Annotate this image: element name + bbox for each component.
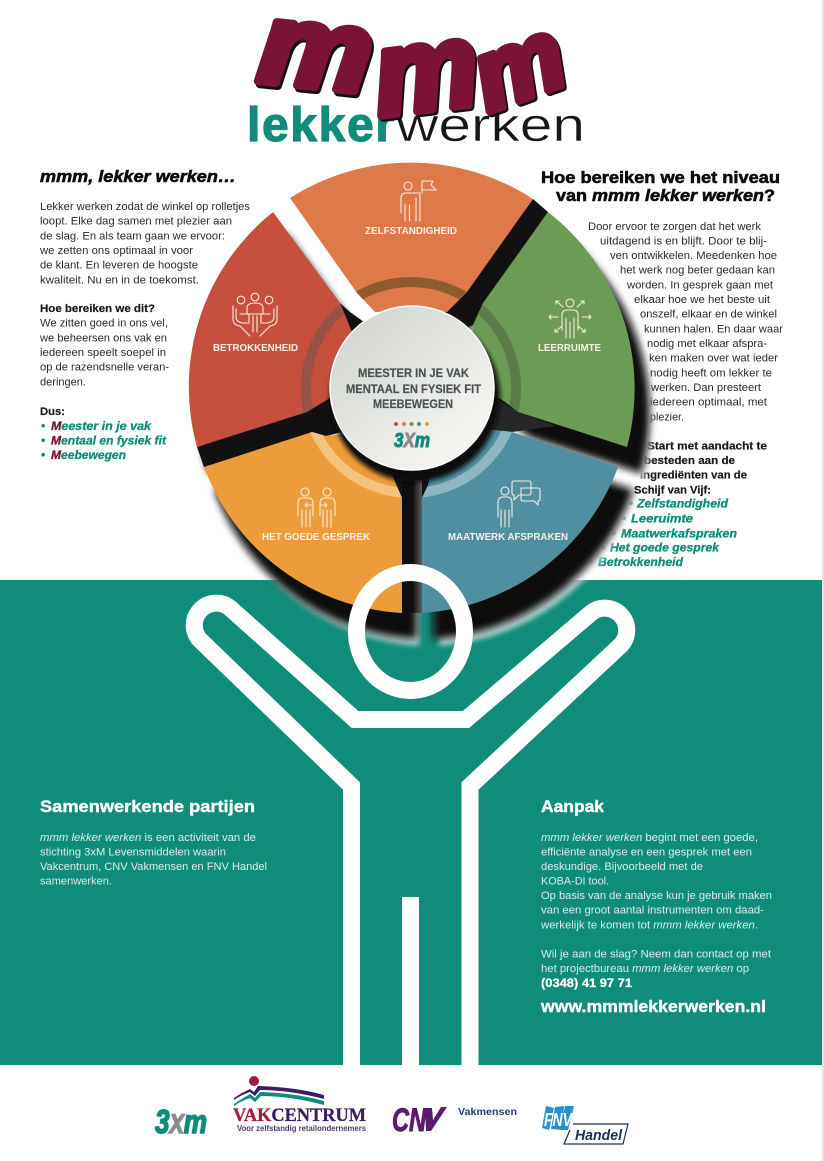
list: dus: •: [41, 421, 45, 433]
white gap between red and orange segments: [281, 190, 382, 328]
how we achieve this paragraph: iedereen speelt soepel in: [40, 347, 166, 359]
logo wordmark: mmm lekker werken: m: [459, 0, 581, 135]
logo: fnv handel: [542, 1106, 628, 1144]
body text: [540, 832, 772, 975]
body text: van een groot aantal instrumenten om daad-: [541, 905, 764, 917]
paragraph: start met aandacht: [634, 440, 767, 496]
list: schijf van vijf: Het goede gesprek: [610, 543, 720, 555]
phone number: (0348) 41 97 71: [541, 978, 633, 990]
heading: Samenwerkende partijen: [40, 797, 255, 816]
teal background panel: [0, 580, 822, 1065]
panel: samenwerkende partijen: [40, 797, 267, 888]
paragraph: door ervoor te zorgen: onszelf, elkaar en de winkel: [640, 309, 777, 321]
segment: leerruimte: [472, 212, 635, 447]
segment: maatwerk afspraken: MAATWERK AFSPRAKEN: [448, 531, 568, 543]
logo: cnv vakmensen: Vakmensen: [458, 1106, 517, 1118]
list: dus: Meebewegen: [51, 450, 126, 462]
heading: hoe bereiken we het niveau: [541, 168, 780, 205]
list: dus: [40, 406, 167, 462]
list: schijf van vijf: Leeruimte: [631, 513, 694, 525]
list: dus: Dus:: [40, 406, 65, 418]
paragraph: door ervoor te zorgen: [588, 221, 783, 423]
logo: vakcentrum: [233, 1076, 366, 1133]
paragraph: door ervoor te zorgen: uitdagend is en blijft. Door te blij-: [600, 235, 767, 247]
list: schijf van vijf: •: [589, 557, 593, 569]
logo wordmark: mmm lekker werken: m: [366, 0, 485, 142]
segment: zelfstandigheid: [290, 162, 533, 312]
paragraph: start met aandacht: ingrediënten van de: [640, 469, 747, 481]
intro paragraph: kwaliteit. Nu en in de toekomst.: [40, 274, 199, 286]
center disk shadow: [330, 312, 500, 482]
icon: person with speech bubbles: [498, 481, 540, 527]
intro paragraph: de slag. En als team gaan we ervoor:: [40, 230, 225, 242]
segment: betrokkenheid: BETROKKENHEID: [213, 342, 298, 354]
logo: 3xm small: 3Xm: [394, 430, 430, 452]
how we achieve this paragraph: we beheersen ons vak en: [39, 332, 167, 344]
intro paragraph: loopt. Elke dag samen met plezier aan: [40, 216, 232, 228]
segment: zelfstandigheid: ZELFSTANDIGHEID: [365, 225, 457, 237]
paragraph: door ervoor te zorgen: werken. Dan presteert: [650, 382, 761, 394]
how we achieve this paragraph: We zitten goed in ons vel,: [40, 318, 168, 330]
paragraph: start met aandacht: Start met aandacht te: [647, 440, 767, 452]
logo: cnv vakmensen: [392, 1102, 517, 1138]
list: schijf van vijf: Maatwerkafspraken: [621, 528, 737, 540]
intro paragraph: Lekker werken zodat de winkel op rolletjes: [40, 201, 250, 213]
logo: 3xm: 3Xm: [155, 1103, 207, 1140]
body text: [40, 832, 267, 888]
body text: KOBA-DI tool.: [541, 876, 609, 888]
panel: aanpak: [540, 797, 772, 1016]
list: schijf van vijf: •: [622, 513, 626, 525]
segment: het goede gesprek: HET GOEDE GESPREK: [262, 531, 370, 543]
logo: vakcentrum: Voor zelfstandig retailondernemers: [237, 1123, 366, 1133]
logo wordmark: mmm lekker werken: lekker: [247, 99, 394, 152]
paragraph: door ervoor te zorgen: Door ervoor te zorgen dat het werk: [588, 221, 761, 233]
body text: het projectbureau mmm lekker werken op: [541, 963, 749, 975]
wheel diagram: schijf van vijf: [189, 163, 652, 645]
right column text: [541, 168, 783, 569]
heading: hoe bereiken we het niveau: Hoe bereiken we het niveau: [541, 168, 780, 187]
center text: MEESTER IN JE VAK: [358, 366, 469, 380]
body text: stichting 3xM Levensmiddelen waarin: [40, 846, 226, 858]
how we achieve this paragraph: op de razendsnelle veran-: [40, 362, 169, 374]
segment: maatwerk afspraken: [422, 430, 618, 613]
list: schijf van vijf: •: [612, 528, 616, 540]
heading: Aanpak: [541, 797, 605, 816]
logo: fnv handel: FNV: [544, 1110, 574, 1130]
body text: samenwerken.: [40, 876, 112, 888]
list: schijf van vijf: •: [601, 543, 605, 555]
intro paragraph: [39, 201, 250, 286]
center disk: [330, 306, 494, 470]
how we achieve this paragraph: deringen.: [40, 376, 86, 388]
list: dus: Mentaal en fysiek fit: [51, 436, 167, 448]
body text: deskundige. Bijvoorbeeld met de: [541, 861, 703, 873]
logo: fnv handel: Handel: [575, 1128, 623, 1144]
segment: betrokkenheid: [188, 212, 352, 447]
heading: hoe bereiken we het niveau: van mmm lekker werken ?: [556, 186, 775, 205]
footer logos: [155, 1076, 628, 1144]
icon: two people talking: [298, 488, 335, 527]
center text: [346, 366, 482, 411]
paragraph: door ervoor te zorgen: elkaar hoe we het beste uit: [634, 294, 770, 306]
list: schijf van vijf: Betrokkenheid: [598, 557, 684, 569]
list: schijf van vijf: •: [629, 499, 633, 511]
paragraph: door ervoor te zorgen: ven ontwikkelen. Meedenken hoe: [610, 250, 777, 262]
paragraph: door ervoor te zorgen: iedereen optimaal, met: [650, 397, 767, 409]
paragraph: door ervoor te zorgen: plezier.: [650, 411, 684, 423]
website: www.mmmlekkerwerken.nl: [540, 997, 766, 1016]
paragraph: start met aandacht: besteden aan de: [644, 455, 735, 467]
figure: person with raised arms: [194, 572, 627, 1065]
body text: Vakcentrum, CNV Vakmensen en FNV Handel: [40, 861, 267, 873]
wheel drop shadow: [202, 187, 648, 637]
body text: Wil je aan de slag? Neem dan contact op met: [541, 948, 771, 960]
icon: three people at table: [233, 293, 277, 336]
center text: MENTAAL EN FYSIEK FIT: [346, 382, 482, 396]
icon: person with flag: [401, 181, 436, 221]
how we achieve this paragraph: Hoe bereiken we dit?: [40, 303, 155, 315]
paragraph: door ervoor te zorgen: worden. In gesprek gaan met: [626, 279, 773, 291]
body text: Op basis van de analyse kun je gebruik maken: [541, 890, 772, 902]
paragraph: door ervoor te zorgen: kunnen halen. En daar waar: [644, 323, 783, 335]
body text: mmm lekker werken begint met een goede,: [541, 832, 758, 844]
list: dus: •: [41, 450, 45, 462]
left intro column: [39, 167, 250, 462]
page edge: [822, 0, 824, 1161]
segment: leerruimte: LEERRUIMTE: [538, 342, 601, 354]
logo wordmark: mmm lekker werken: m: [457, 0, 579, 133]
logo wordmark: mmm lekker werken: [247, 0, 585, 152]
heading: mmm, lekker werken: mmm, lekker werken…: [40, 167, 236, 186]
list: dus: Meester in je vak: [51, 421, 152, 433]
logo: cnv vakmensen: CN: [392, 1102, 427, 1138]
center text: MEEBEWEGEN: [373, 397, 453, 411]
logo wordmark: mmm lekker werken: werken: [395, 98, 585, 151]
icon: person with arrows: [549, 299, 591, 338]
gap shadows between segments: [197, 199, 556, 613]
list: schijf van vijf: [589, 499, 737, 569]
intro paragraph: we zetten ons optimaal in voor: [39, 245, 193, 257]
body text: efficiënte analyse en een gesprek met een: [541, 846, 752, 858]
intro paragraph: de klant. En leveren de hoogste: [40, 260, 198, 272]
list: schijf van vijf: Zelfstandigheid: [636, 499, 729, 511]
paragraph: door ervoor te zorgen: ken maken over wat ieder: [649, 353, 778, 365]
paragraph: door ervoor te zorgen: nodig met elkaar afspra-: [647, 338, 767, 350]
logo wordmark: mmm lekker werken: m: [368, 0, 487, 144]
body text: mmm lekker werken is een activiteit van de: [40, 832, 256, 844]
paragraph: start met aandacht: Schijf van Vijf:: [634, 484, 711, 496]
paragraph: door ervoor te zorgen: nodig heeft om lekker te: [650, 367, 772, 379]
list: dus: •: [41, 436, 45, 448]
coloured dots: [394, 422, 429, 426]
wheel halo: [221, 244, 652, 645]
paragraph: door ervoor te zorgen: het werk nog beter gedaan kan: [620, 265, 775, 277]
logo: vakcentrum: VAKCENTRUM: [233, 1105, 366, 1126]
segment: het goede gesprek: [204, 432, 402, 613]
body text: werkelijk te komen tot mmm lekker werken .: [540, 920, 758, 932]
how we achieve this paragraph: [39, 303, 169, 388]
